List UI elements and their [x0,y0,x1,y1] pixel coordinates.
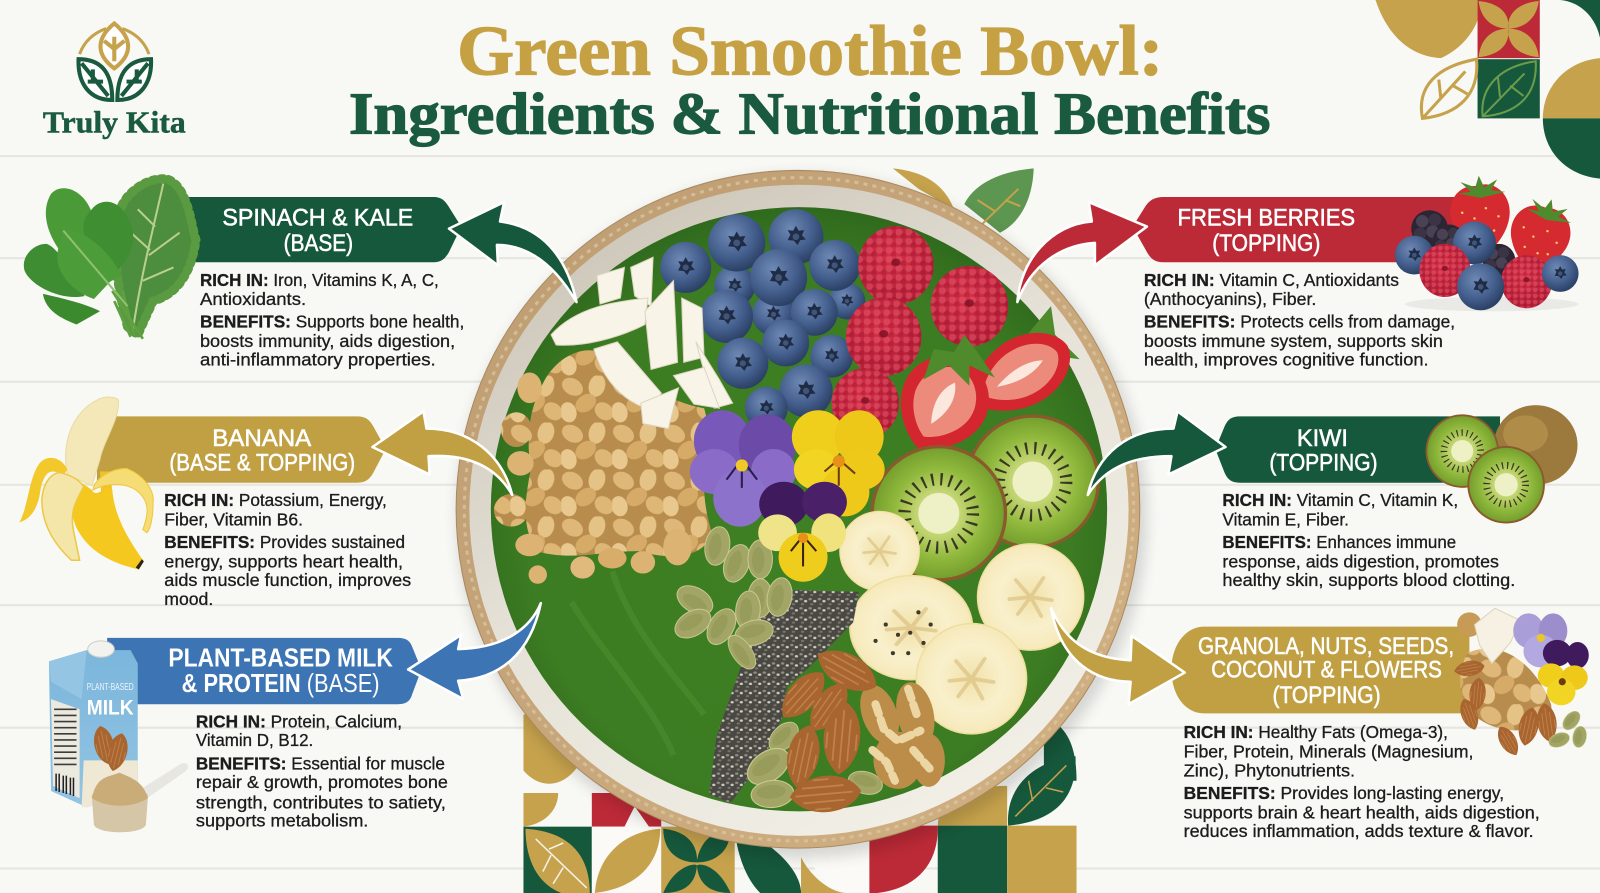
panel: banana [19,397,512,609]
icon: green leaves [79,59,151,100]
strawberries [879,306,1085,470]
granola [494,350,711,584]
green leaf [964,168,1034,233]
banner [97,416,386,483]
small pansy [758,482,847,582]
arrow: plant-based milk [408,603,541,699]
pansy flowers [690,410,885,582]
body text: RICH IN: Iron, Vitamins K, A, C, [200,270,439,290]
body text: supports metabolism. [196,811,368,831]
raspberries [832,226,1008,438]
title [349,11,1270,147]
icon: spinach and kale [24,179,196,339]
pumpkin seeds [670,525,885,809]
cap [88,641,114,657]
body text: Zinc), Phytonutrients. [1184,761,1355,781]
gold leaf [893,168,954,209]
body text [196,712,448,831]
banner heading: COCONUT & FLOWERS [1211,657,1442,684]
banner heading: (TOPPING) [1212,230,1320,257]
walnuts [853,679,945,789]
body text: RICH IN: Vitamin C, Vitamin K, [1222,490,1458,510]
body text: BENEFITS: Supports bone health, [200,312,464,332]
kale [115,179,196,335]
flower: lavender pansy [1513,613,1567,667]
logo name: Truly Kita [43,106,186,140]
banner heading [1178,205,1355,257]
body text: repair & growth, promotes bone [196,772,448,792]
banner heading: (BASE & TOPPING) [169,449,355,476]
icon: milk carton and protein scoop: MILK [87,695,134,719]
body text: mood. [164,589,213,609]
body text: Vitamin E, Fiber. [1222,510,1349,530]
banner [1171,627,1469,713]
scoop [92,788,148,832]
body text: anti-inflammatory properties. [200,349,436,369]
yellow pansy [792,410,885,516]
arrow: berries [1017,202,1147,302]
arrow: spinach [449,202,577,302]
arrow: banana [372,411,512,495]
arrow: granola [1051,608,1185,704]
icon: milk carton and protein scoop [49,641,188,832]
icon: gold arcs [80,29,149,54]
banner heading: (TOPPING) [1269,449,1378,476]
body text: healthy skin, supports blood clotting. [1222,570,1515,590]
body text [1222,490,1515,590]
arrow: kiwi [1088,411,1226,495]
body text: Antioxidants. [200,289,306,309]
coconut flakes [551,257,733,429]
icon: toppings pile [1453,608,1589,759]
body text: BENEFITS: Enhances immune [1222,532,1456,552]
body text: boosts immune system, supports skin [1144,331,1443,351]
banner heading: (TOPPING) [1272,682,1381,709]
body text: (Anthocyanins), Fiber. [1144,289,1316,309]
blueberries [660,209,865,430]
body text: supports brain & heart health, aids digestion, [1184,802,1540,822]
banner heading: PLANT-BASED MILK [168,644,393,672]
bowl ceramic [469,185,1129,836]
bowl [456,170,1147,858]
banner [179,197,461,262]
body text: RICH IN: Vitamin C, Antioxidants [1144,270,1399,290]
body text: BENEFITS: Protects cells from damage, [1144,312,1455,332]
logo: Truly Kita [43,23,186,140]
icon: banana [19,397,153,569]
flower: dark pansy [1543,640,1589,668]
body text: BENEFITS: Essential for muscle [196,754,445,774]
spinach leaves [43,294,100,325]
body text: aids muscle function, improves [164,570,412,590]
banana slices [840,511,1084,734]
banner heading: BANANA [212,425,311,452]
banner heading [1269,425,1378,476]
chia seeds [709,590,859,803]
smoothie [491,207,1107,811]
banner heading [1198,633,1454,709]
stems [112,291,143,339]
top right geometric pattern [1376,0,1600,179]
body text: RICH IN: Potassium, Energy, [164,490,387,510]
body text: Fiber, Protein, Minerals (Magnesium, [1184,741,1473,761]
banner heading: & PROTEIN (BASE) [182,670,380,698]
scoop handle [138,763,188,801]
banner heading: (BASE) [284,230,353,257]
banner [107,638,421,704]
title line 2: Ingredients & Nutritional Benefits [349,81,1270,147]
almonds on carton [91,724,118,766]
banner [1215,416,1500,483]
banner [1133,197,1459,262]
banner heading: SPINACH & KALE [222,205,413,232]
body text [164,490,412,609]
panel: spinach and kale [24,179,577,369]
body text: BENEFITS: Provides long-lasting energy, [1184,783,1504,803]
banner heading [222,205,413,257]
banner heading: KIWI [1297,425,1348,452]
carton [49,650,138,807]
icon: kiwi fruit [1415,404,1578,524]
body text: health, improves cognitive function. [1144,349,1429,369]
body text: Vitamin D, B12. [196,730,313,750]
title line 1: Green Smoothie Bowl: [457,11,1163,91]
almonds [772,640,884,815]
icon: berries [1395,172,1579,311]
flower: yellow pansy [1538,663,1588,705]
panel: granola, nuts, seeds, coconut and flowers [1051,608,1589,841]
body text [1144,270,1455,369]
purple pansy [690,410,796,527]
icon: gold leaf [100,23,128,68]
body text: reduces inflammation, adds texture & flavor. [1184,821,1534,841]
body text: energy, supports heart health, [164,551,403,571]
banner heading [169,425,355,476]
body text: RICH IN: Healthy Fats (Omega-3), [1184,722,1448,742]
leaves behind bowl [893,168,1034,233]
bowl rim [456,170,1140,848]
body text: strength, contributes to satiety, [196,792,446,812]
body text: boosts immunity, aids digestion, [200,331,455,351]
banner heading: GRANOLA, NUTS, SEEDS, [1198,633,1454,660]
body text: Fiber, Vitamin B6. [164,510,303,530]
panel: fresh berries [1017,172,1579,369]
panel: plant-based milk and protein [49,603,541,832]
banner heading [168,644,393,698]
carton labels: PLANT-BASED [87,682,134,693]
bowl shadow [457,175,1147,858]
body text: response, aids digestion, promotes [1222,551,1499,571]
body text: RICH IN: Protein, Calcium, [196,712,402,732]
body text: BENEFITS: Provides sustained [164,532,405,552]
body text [200,270,464,369]
body text [1184,722,1540,841]
kiwi slices [870,414,1100,582]
bottom geometric pattern [523,714,1077,893]
panel: kiwi [1088,404,1578,590]
banner heading: FRESH BERRIES [1178,205,1355,232]
